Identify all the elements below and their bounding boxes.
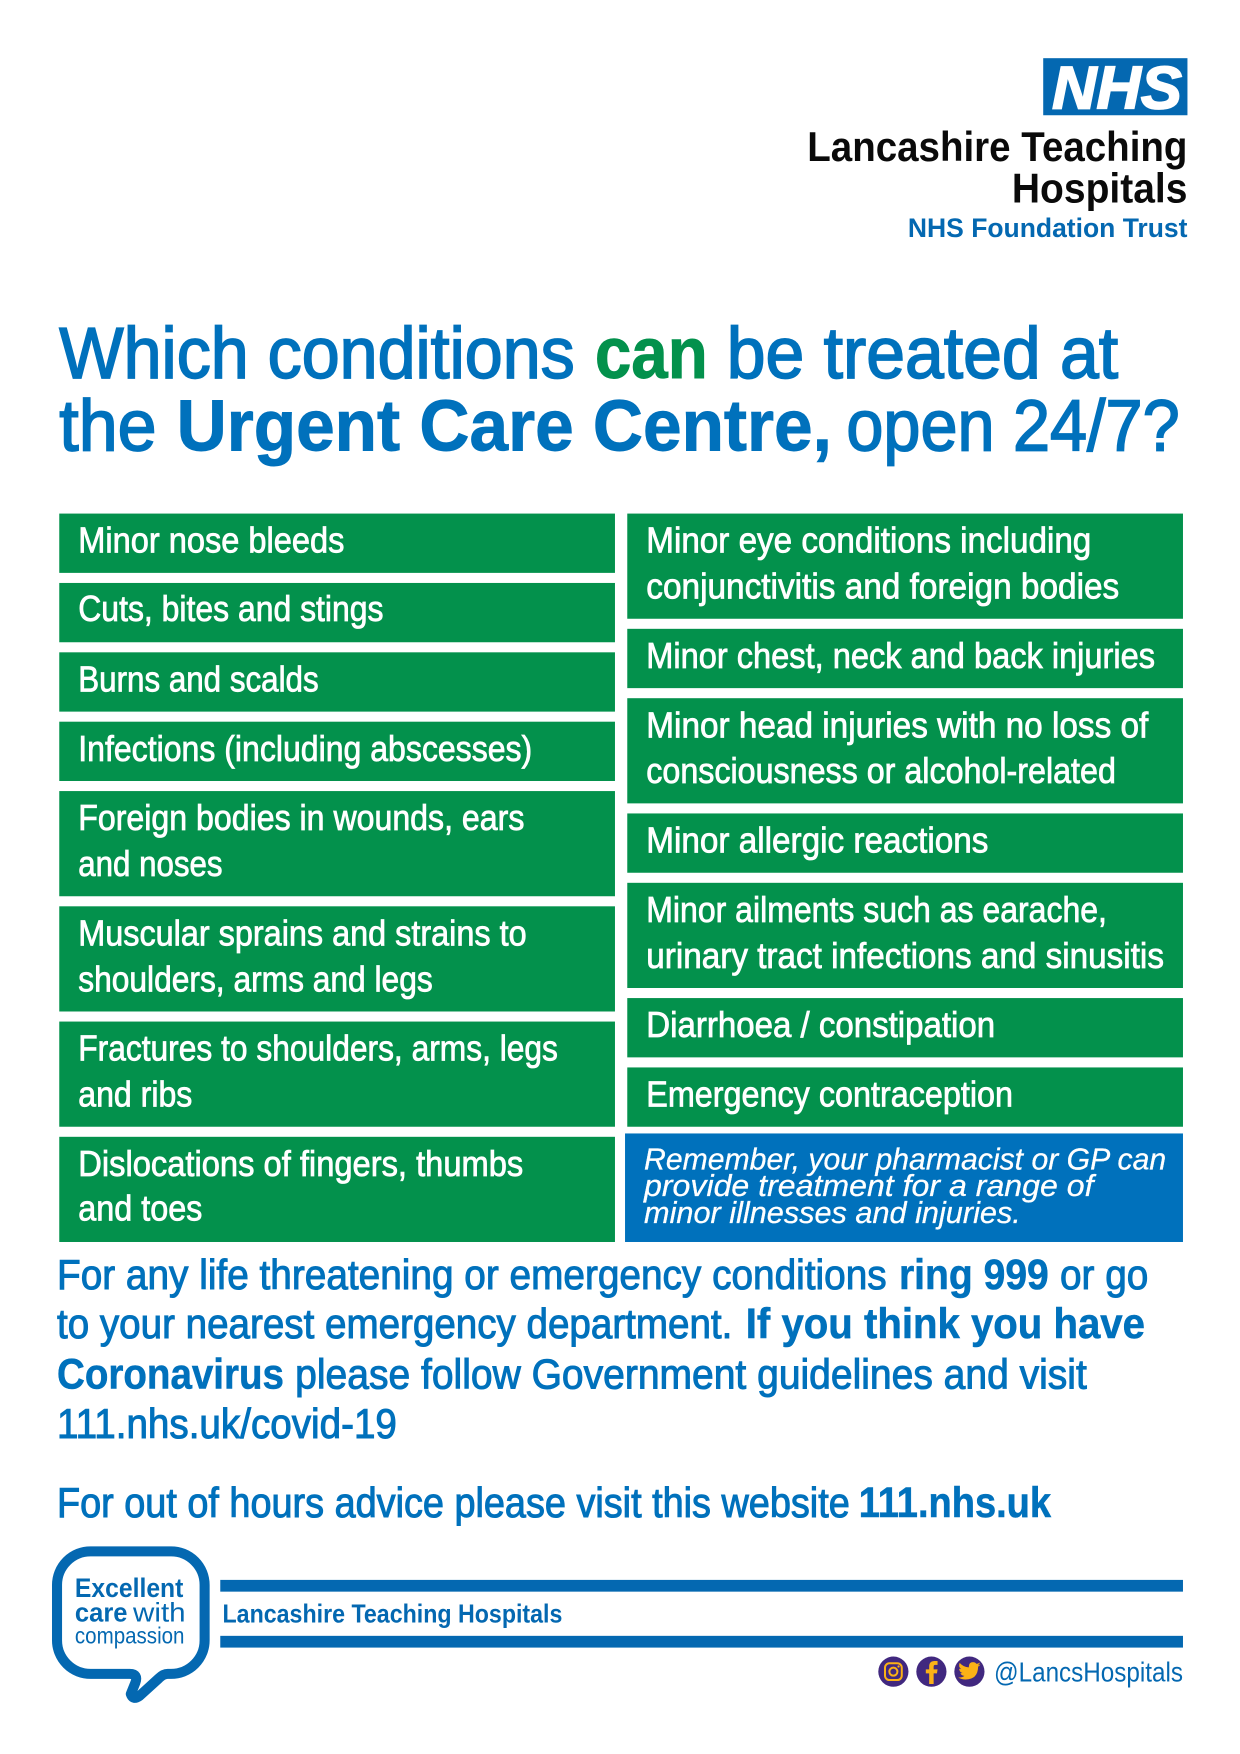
item: emergency contraception: Emergency contraception <box>646 1075 1013 1115</box>
title: Which conditions <box>59 313 575 394</box>
icon: twitter <box>954 1657 985 1687</box>
text block: emergency and coronavirus advice: to your nearest emergency department. <box>57 1301 732 1347</box>
text block: emergency and coronavirus advice: 111.nhs.uk/covid-19 <box>57 1401 397 1447</box>
item: cuts, bites and stings <box>59 583 615 642</box>
item: chest, neck and back <box>627 629 1183 688</box>
text block: emergency and coronavirus advice: or go <box>1060 1252 1148 1298</box>
foundation trust line: NHS Foundation Trust <box>908 213 1188 243</box>
item: muscular sprains <box>59 906 615 1011</box>
item: dislocations: and toes <box>78 1189 202 1229</box>
NHS lozenge: NHS <box>1052 54 1182 122</box>
item: foreign bodies <box>59 791 615 896</box>
item: head injuries: consciousness or alcohol-related <box>646 751 1116 791</box>
title: open 24/7? <box>846 385 1180 466</box>
item: cuts, bites and stings: Cuts, bites and stings <box>78 589 384 629</box>
item: muscular sprains: Muscular sprains and strains to <box>78 913 527 953</box>
item: burns and scalds <box>59 652 615 712</box>
speech bubble: excellent care with compassion: Excellent <box>75 1573 183 1603</box>
item: fractures <box>59 1022 615 1127</box>
item: dislocations: Dislocations of fingers, thumbs <box>78 1144 523 1184</box>
text block: emergency and coronavirus advice: For any life threatening or emergency conditions <box>57 1252 887 1298</box>
item: infections: Infections (including abscesses) <box>78 729 532 769</box>
item: chest, neck and back: Minor chest, neck and back injuries <box>646 636 1155 676</box>
text block: emergency and coronavirus advice <box>57 1252 1148 1447</box>
item: foreign bodies: Foreign bodies in wounds, ears <box>78 798 524 838</box>
item: minor nose bleeds: Minor nose bleeds <box>78 521 344 561</box>
item: minor eye conditions <box>627 514 1183 619</box>
callout: pharmacist or GP: provide treatment for a range of <box>643 1168 1097 1203</box>
text block: emergency and coronavirus advice: Coronavirus <box>57 1352 284 1399</box>
trust name second line: Hospitals <box>1012 166 1187 212</box>
speech bubble: excellent care with compassion: compassion <box>75 1623 184 1649</box>
title: be treated at <box>727 313 1118 394</box>
text block: emergency and coronavirus advice: please follow Government guidelines and visit <box>295 1352 1087 1398</box>
item: infections <box>59 722 615 781</box>
title: the <box>59 385 157 466</box>
speech bubble: excellent care with compassion <box>57 1551 205 1698</box>
item: emergency contraception <box>627 1067 1183 1127</box>
callout: pharmacist or GP: Remember, your pharmacist or GP can <box>644 1141 1166 1176</box>
item: diarrhoea: Diarrhoea / constipation <box>646 1005 995 1045</box>
item: head injuries: Minor head injuries with no loss of <box>646 705 1148 745</box>
title: Urgent Care Centre, <box>177 385 832 466</box>
panel: conditions right column <box>625 514 1183 1242</box>
social media row <box>878 1657 1183 1688</box>
item: minor eye conditions: Minor eye conditions including <box>646 521 1091 561</box>
item: fractures: Fractures to shoulders, arms, legs <box>78 1029 558 1069</box>
callout: pharmacist or GP: minor illnesses and injuries. <box>644 1195 1021 1230</box>
text block: emergency and coronavirus advice: ring 999 <box>899 1252 1049 1299</box>
speech bubble: excellent care with compassion: with <box>132 1597 186 1627</box>
item: minor nose bleeds <box>59 514 615 573</box>
item: minor ailments: urinary tract infections and sinusitis <box>646 936 1164 976</box>
trust name: Lancashire Teaching <box>807 124 1187 170</box>
item: dislocations <box>59 1137 615 1242</box>
social handle: @LancsHospitals <box>994 1657 1183 1688</box>
item: head injuries <box>627 698 1183 803</box>
callout: pharmacist or GP <box>625 1133 1183 1242</box>
item: diarrhoea <box>627 998 1183 1057</box>
item: foreign bodies: and noses <box>78 844 223 884</box>
item: minor eye conditions: conjunctivitis and foreign bodies <box>646 567 1119 607</box>
text block: emergency and coronavirus advice: If you think you have <box>746 1301 1145 1348</box>
footer band with trust name: Lancashire Teaching Hospitals <box>223 1600 562 1628</box>
item: burns and scalds: Burns and scalds <box>78 659 319 699</box>
item: allergic reactions: Minor allergic reactions <box>646 821 988 861</box>
text block: out of hours advice: 111.nhs.uk <box>859 1480 1051 1527</box>
text block: out of hours advice: For out of hours advice please visit this website <box>57 1480 850 1526</box>
item: allergic reactions <box>627 813 1183 873</box>
title <box>59 313 1180 466</box>
item: muscular sprains: shoulders, arms and legs <box>78 959 433 999</box>
icon: instagram <box>878 1657 908 1687</box>
panel: conditions left column <box>59 514 615 1242</box>
title: can <box>595 313 708 394</box>
speech bubble: excellent care with compassion: care <box>75 1597 127 1627</box>
icon: facebook <box>916 1657 946 1687</box>
item: fractures: and ribs <box>78 1075 192 1115</box>
item: minor ailments <box>627 883 1183 988</box>
footer band with trust name <box>220 1580 1183 1648</box>
item: minor ailments: Minor ailments such as earache, <box>646 890 1107 930</box>
NHS trust logo <box>807 54 1188 243</box>
